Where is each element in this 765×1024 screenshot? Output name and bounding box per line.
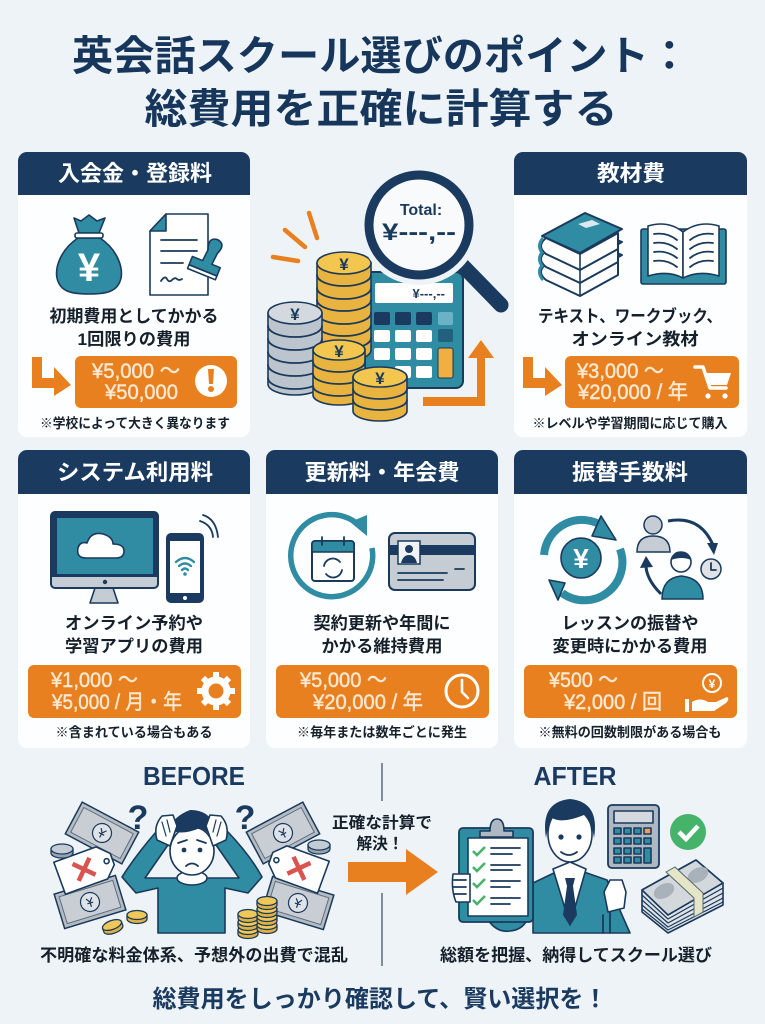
icon: green check (670, 814, 706, 850)
price box: ¥2,000 / 回 (563, 691, 662, 714)
question marks: ? (128, 799, 148, 837)
description text: かかる維持費用 (322, 637, 442, 656)
magnifier (365, 171, 501, 305)
title (72, 33, 690, 132)
price box: ¥5,000 ～ (299, 669, 387, 692)
orange rays (273, 213, 317, 261)
footer message: 総費用をしっかり確認して、賢い選択を！ (152, 986, 608, 1013)
icon: gear (197, 672, 235, 710)
middle gold coin stack: ¥ (334, 342, 344, 361)
icon: stacked books (540, 213, 622, 296)
description text: 初期費用としてかかる (50, 307, 218, 326)
section: before (40, 761, 348, 965)
description text: 契約更新や年間に (314, 613, 450, 633)
title: 英会話スクール選びのポイント： (72, 33, 690, 79)
icon: money bag: ¥ (78, 246, 101, 290)
callout: solved by calculation (332, 813, 432, 853)
arrow (523, 357, 562, 396)
before heading: BEFORE (143, 761, 245, 791)
description text: 変更時にかかる費用 (552, 637, 708, 656)
coins (51, 840, 330, 938)
up arrow (423, 340, 494, 406)
description text: オンライン教材 (572, 330, 698, 349)
price box (28, 665, 241, 718)
price box: ¥1,000 ～ (50, 669, 138, 692)
front gold coin stack: ¥ (375, 369, 385, 388)
silver coin stack: ¥ (290, 305, 300, 324)
icon: yen cycle: ¥ (573, 543, 589, 574)
question marks: ? (235, 799, 255, 837)
illustration: confident man (488, 799, 630, 933)
illustration: confused man (122, 810, 262, 933)
icon: money bag (57, 215, 121, 294)
clipboard (452, 819, 533, 922)
arrow: before to after (348, 849, 438, 895)
description text (314, 613, 450, 656)
price box (276, 665, 489, 718)
icon: cart (695, 367, 731, 399)
panel header: transfer fee: 振替手数料 (572, 460, 688, 485)
description text (552, 614, 708, 656)
icon: monitor (51, 512, 158, 603)
icon: member card (389, 533, 475, 590)
after caption: 総額を把握、納得してスクール選び (440, 946, 712, 965)
price box: ¥50,000 (104, 381, 178, 404)
icon: clock (446, 675, 478, 707)
panel header: renewal fee (266, 450, 498, 494)
money stack (642, 860, 723, 933)
note: ※無料の回数制限がある場合も (538, 724, 722, 740)
price box: ¥3,000 ～ (576, 360, 664, 383)
description text (50, 307, 218, 349)
calculator icon (608, 805, 659, 868)
note: ※レベルや学習期間に応じて購入 (532, 415, 728, 431)
title: 総費用を正確に計算する (144, 86, 618, 132)
calculator: ¥---,-- (412, 286, 445, 301)
callout: solved by calculation: 正確な計算で (332, 813, 432, 832)
silver coin stack (268, 302, 322, 395)
icon: renewal calendar (291, 515, 373, 597)
front gold coin stack (353, 367, 407, 421)
description text: 学習アプリの費用 (65, 636, 203, 656)
note: ※学校によって大きく異なります (40, 415, 230, 431)
price box: ¥20,000 / 年 (577, 381, 688, 404)
description text: 1回限りの費用 (78, 330, 190, 349)
panel: system fee (18, 450, 250, 748)
panel header: system fee: システム利用料 (57, 460, 213, 485)
note: ※含まれている場合もある (56, 724, 212, 740)
callout: solved by calculation: 解決！ (356, 835, 404, 853)
icon: contract and stamp (150, 214, 230, 295)
icon: schedule swap people (637, 516, 721, 599)
price box: ¥20,000 / 年 (312, 691, 423, 714)
icon: hand with yen coin: ¥ (709, 677, 716, 691)
question marks (128, 799, 255, 837)
price box: ¥500 ～ (548, 669, 618, 692)
icon: yen cycle (544, 516, 622, 600)
panel header: system fee (18, 450, 250, 494)
magnifier: ¥---,-- (382, 219, 456, 246)
calculator (365, 272, 463, 388)
panel header: entry fee (18, 152, 250, 195)
icon: hand with yen coin (685, 674, 728, 712)
section: after (440, 761, 723, 965)
arrow (32, 357, 71, 396)
middle gold coin stack (313, 340, 365, 405)
panel: transfer fee (514, 450, 747, 748)
price box: ¥5,000 / 月・年 (51, 691, 182, 714)
note: ※毎年または数年ごとに発生 (297, 724, 467, 740)
description text (538, 306, 722, 349)
panel header: materials (514, 152, 747, 195)
panel header: renewal fee: 更新料・年会費 (304, 460, 460, 485)
description text: テキスト、ワークブック、 (538, 306, 722, 326)
panel header: materials: 教材費 (597, 161, 665, 186)
panel header: entry fee: 入会金・登録料 (58, 161, 212, 186)
icon: open book (641, 224, 726, 284)
tall gold coin stack (317, 252, 371, 361)
magnifier: Total: (400, 202, 442, 219)
price box (524, 665, 737, 718)
panel: entry fee (18, 152, 250, 437)
price box: ¥5,000 ～ (91, 360, 180, 383)
panel: renewal fee (266, 450, 498, 748)
price box (75, 356, 237, 408)
description text (65, 614, 203, 656)
price tags with red crosses (54, 842, 329, 894)
divider (381, 763, 383, 966)
money bills (54, 802, 334, 930)
panel: materials (514, 152, 747, 437)
description text: オンライン予約や (65, 614, 203, 633)
after heading: AFTER (534, 761, 617, 791)
before caption: 不明確な料金体系、予想外の出費で混乱 (40, 945, 348, 965)
icon: exclamation (195, 365, 227, 397)
tall gold coin stack: ¥ (339, 255, 349, 274)
price box (565, 356, 739, 408)
icon: phone (166, 515, 218, 603)
central illustration: coins, calculator and magnifier (268, 171, 501, 421)
panel header: transfer fee (514, 450, 747, 494)
description text: レッスンの振替や (562, 614, 698, 633)
